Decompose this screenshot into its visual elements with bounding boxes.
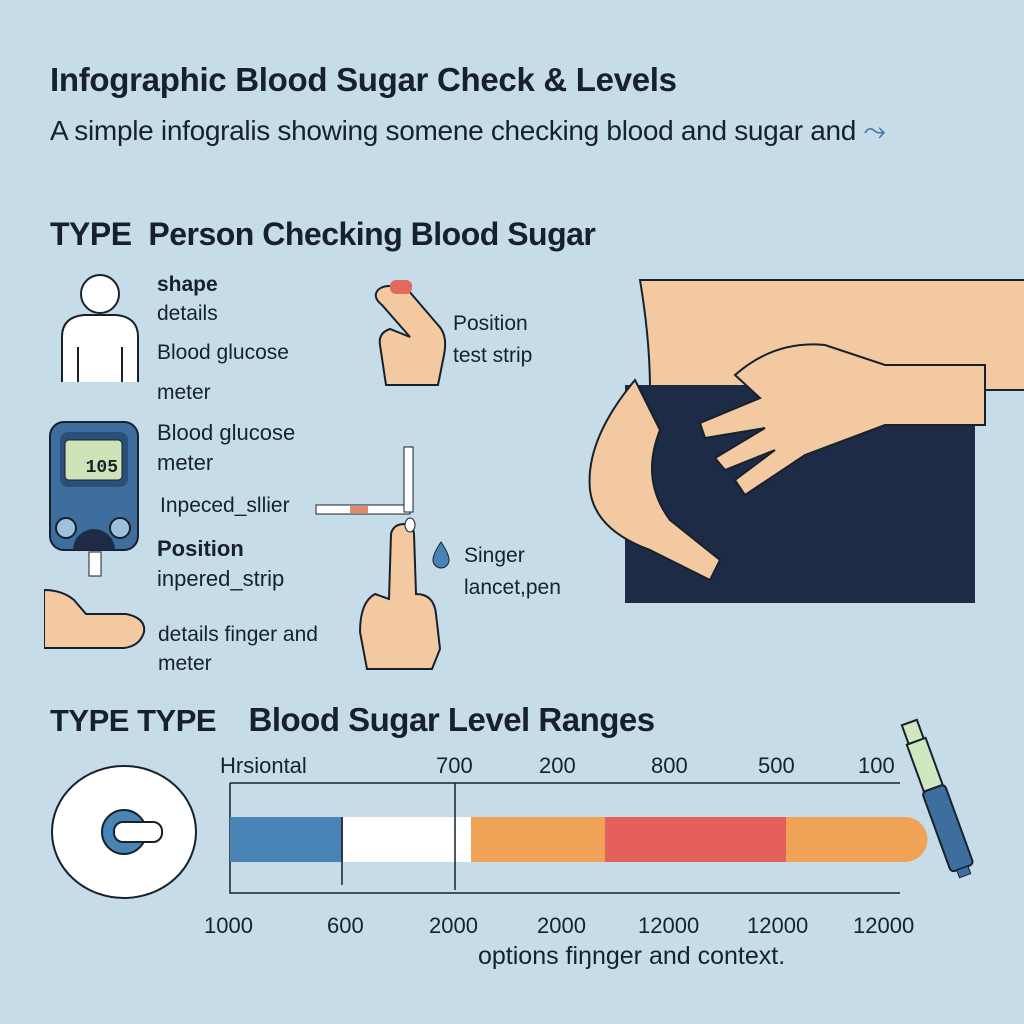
text: position strip: Position — [157, 536, 244, 561]
chart: range bar: 800 — [651, 753, 688, 778]
text: position test strip: test strip — [453, 344, 532, 367]
chart: range bar: 12000 — [638, 913, 699, 938]
text: singer lancet: lancet,pen — [464, 576, 561, 599]
text: shape details — [157, 273, 289, 404]
text: position test strip: Position — [453, 312, 528, 335]
text: meter labels — [157, 420, 295, 475]
text: details finger: meter — [158, 652, 212, 675]
chart: range bar: 600 — [327, 913, 364, 938]
chart: range bar: 100 — [858, 753, 895, 778]
chart: range bar: Hrsiontal — [220, 753, 307, 778]
text: position strip — [157, 536, 284, 591]
chart: range bar: 12000 — [853, 913, 914, 938]
chart: range bar: 2000 — [429, 913, 478, 938]
text: shape details: meter — [157, 381, 211, 404]
chart: range bar: 2000 — [537, 913, 586, 938]
text: inpeced slier: Inpeced_sllier — [160, 494, 290, 517]
chart: range bar: 500 — [758, 753, 795, 778]
section heading: person checking: TYPE Person Checking Blood Sugar — [50, 216, 595, 252]
text: position test strip — [453, 312, 532, 367]
text: shape details: Blood glucose — [157, 341, 289, 364]
icon: glucose meter — [49, 421, 139, 576]
text: position strip: inpered_strip — [157, 566, 284, 591]
text: shape details: details — [157, 302, 218, 325]
icon: person — [61, 274, 139, 382]
chart: range bar: 1000 — [204, 913, 253, 938]
text: shape details: shape — [157, 273, 218, 296]
text: meter labels: meter — [157, 450, 213, 475]
title: Infographic Blood Sugar Check & Levels — [50, 61, 677, 98]
icon: open hand — [44, 589, 146, 649]
text: details finger — [158, 623, 318, 675]
chart: range bar — [204, 753, 928, 938]
icon: test strips — [316, 446, 414, 514]
chart: range bar: 200 — [539, 753, 576, 778]
icon: hand with finger — [374, 280, 446, 386]
section heading: ranges: TYPE TYPE Blood Sugar Level Ranges — [50, 701, 655, 738]
subtitle: A simple infogralis showing somene checking blood and sugar and ⤳ — [50, 115, 886, 146]
text: options caption: options fiŋnger and context. — [478, 942, 785, 970]
chart: range bar: 12000 — [747, 913, 808, 938]
text: singer lancet — [464, 544, 561, 599]
icon: lancet pen — [900, 718, 974, 878]
chart: range bar: 700 — [436, 753, 473, 778]
text: meter labels: Blood glucose — [157, 420, 295, 445]
text: details finger: details finger and — [158, 623, 318, 646]
text: singer lancet: Singer — [464, 544, 525, 567]
illustration: belly — [588, 279, 1024, 603]
icon: finger with drop — [359, 518, 450, 670]
icon: glucose meter: 105 — [86, 458, 118, 478]
icon: circle lancet — [51, 765, 197, 899]
